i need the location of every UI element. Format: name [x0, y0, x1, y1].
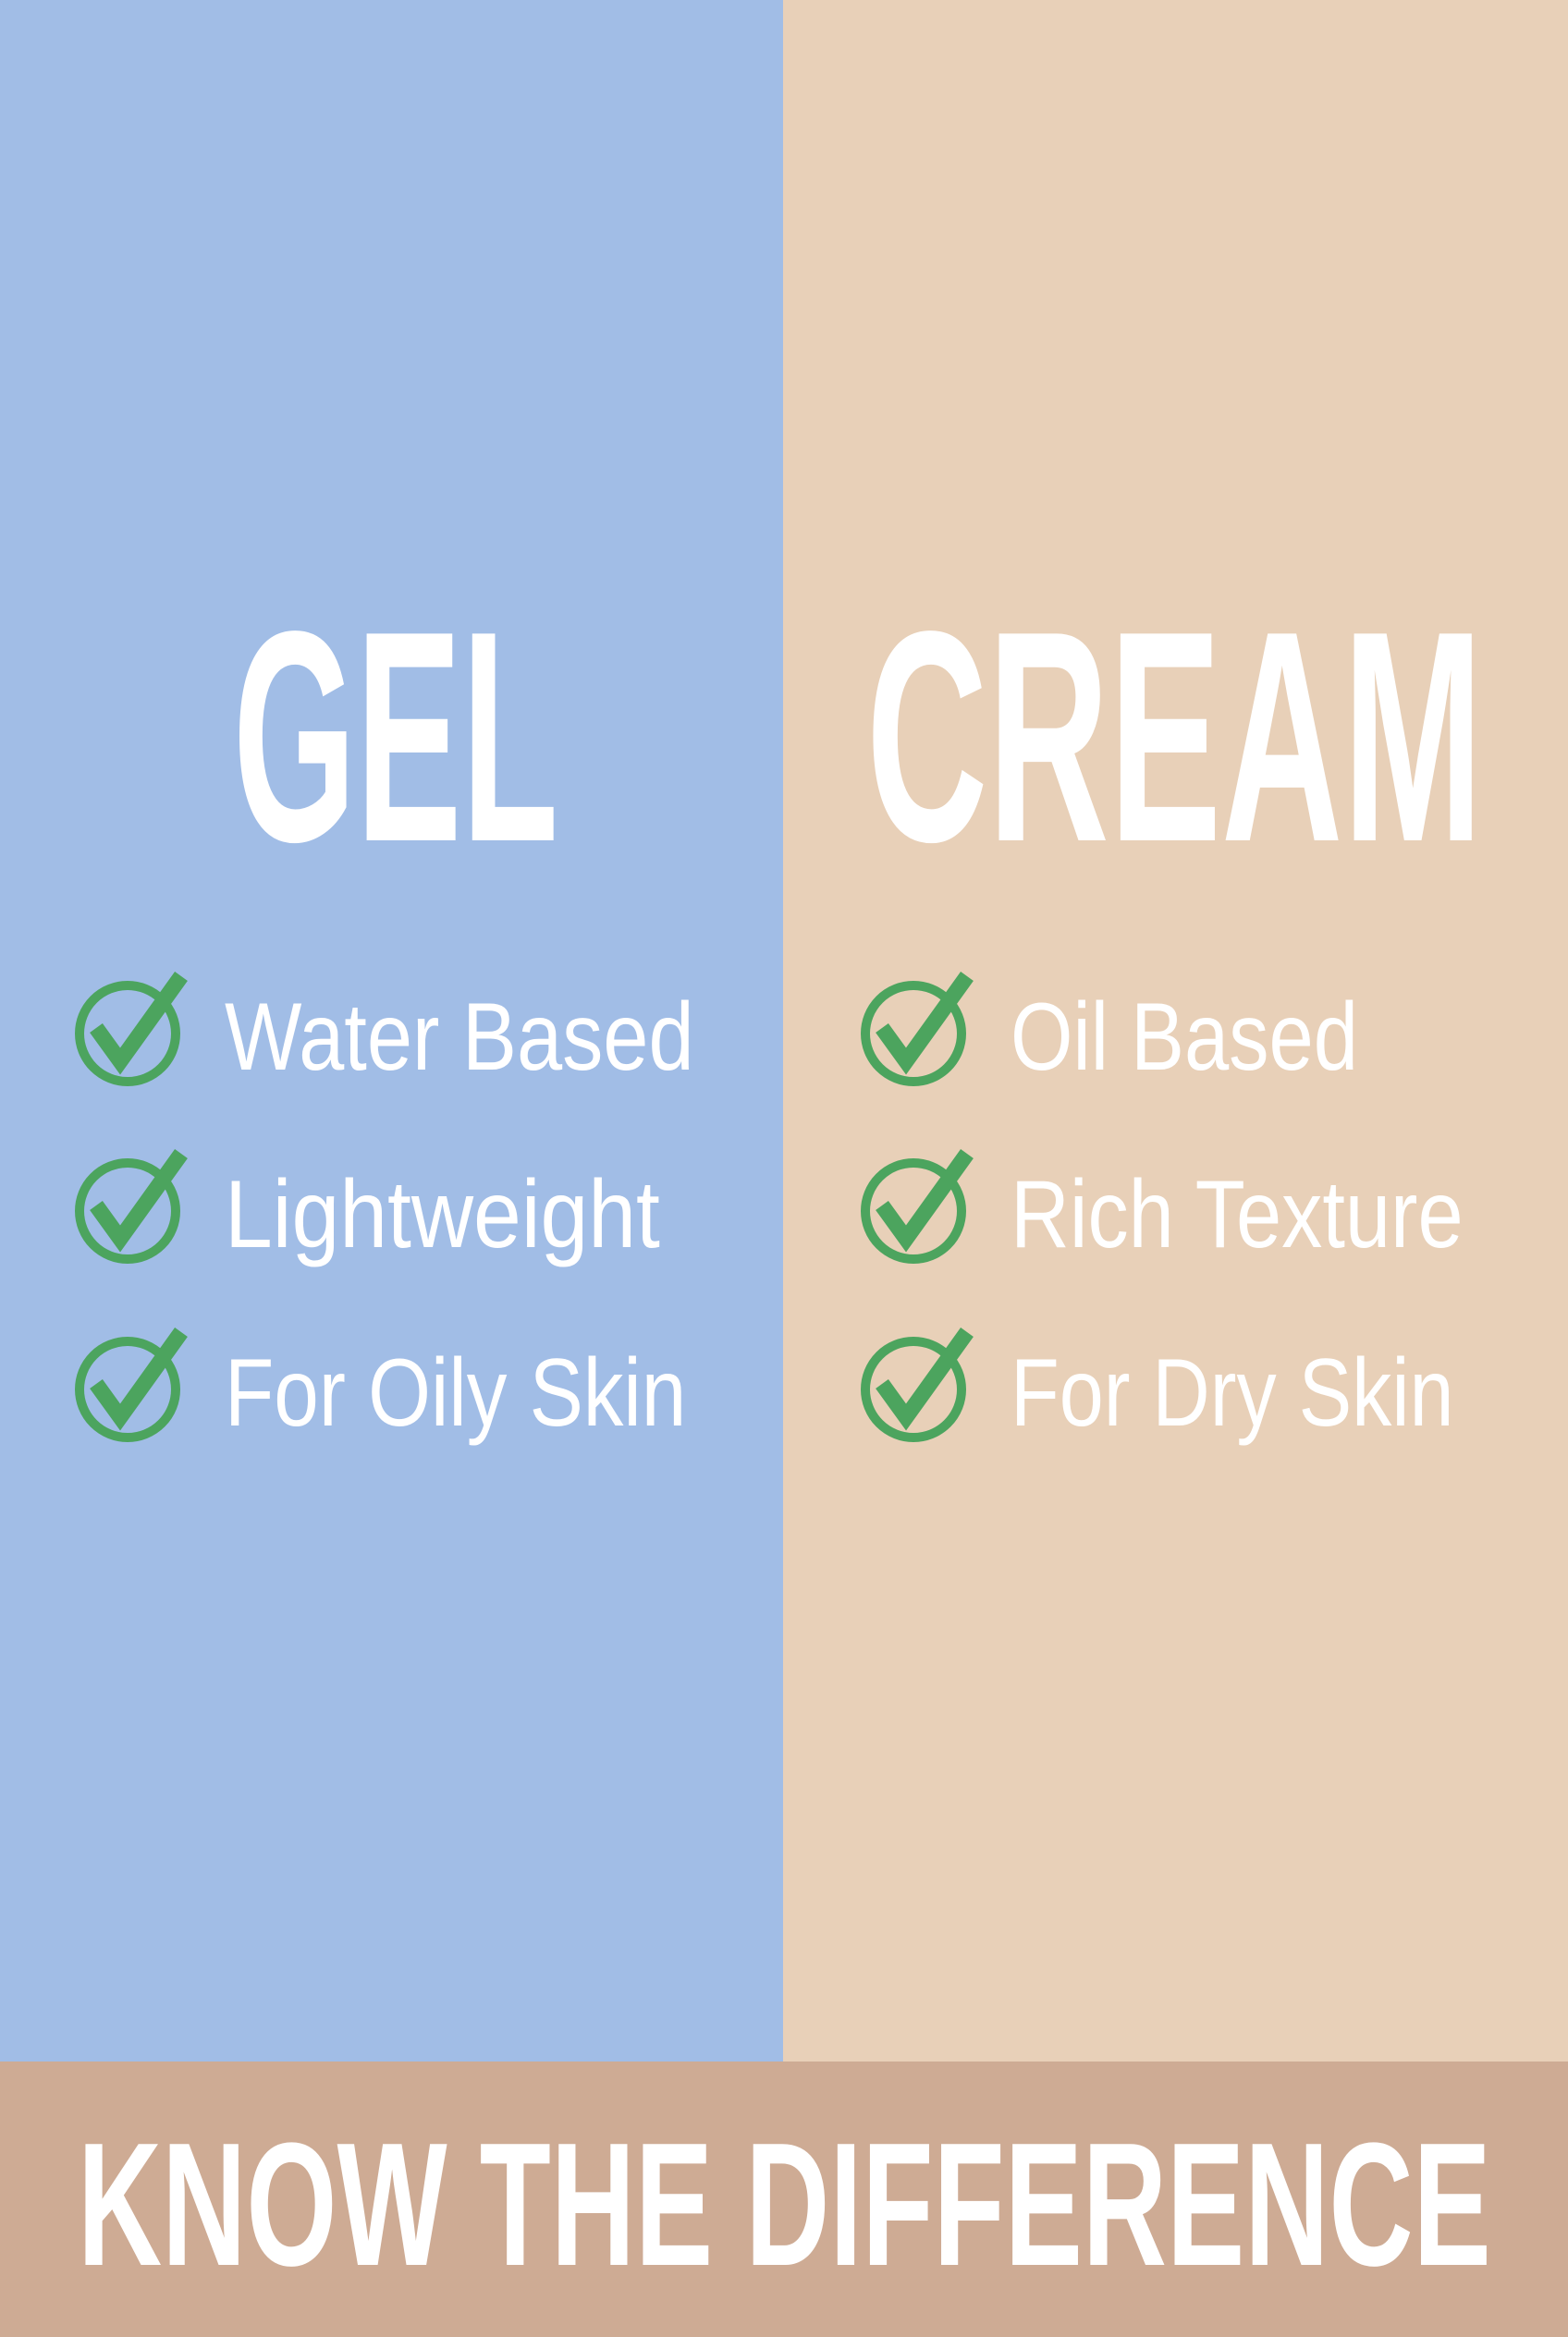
- item: water based: Water Based: [225, 984, 694, 1091]
- item: for oily skin: For Oily Skin: [225, 1340, 686, 1447]
- item: rich texture: Rich Texture: [1011, 1161, 1464, 1268]
- item: oil based: Oil Based: [1011, 984, 1358, 1091]
- item: oil based: [865, 976, 1358, 1091]
- footer text: KNOW THE DIFFERENCE: [78, 2107, 1491, 2303]
- heading: CREAM: CREAM: [866, 569, 1483, 904]
- item: lightweight: Lightweight: [225, 1160, 660, 1267]
- panel: cream: [783, 0, 1568, 2062]
- heading: GEL: GEL: [233, 570, 558, 905]
- footer banner: [0, 2062, 1568, 2337]
- item: for dry skin: For Dry Skin: [1011, 1339, 1453, 1447]
- panel: gel: [0, 0, 783, 2062]
